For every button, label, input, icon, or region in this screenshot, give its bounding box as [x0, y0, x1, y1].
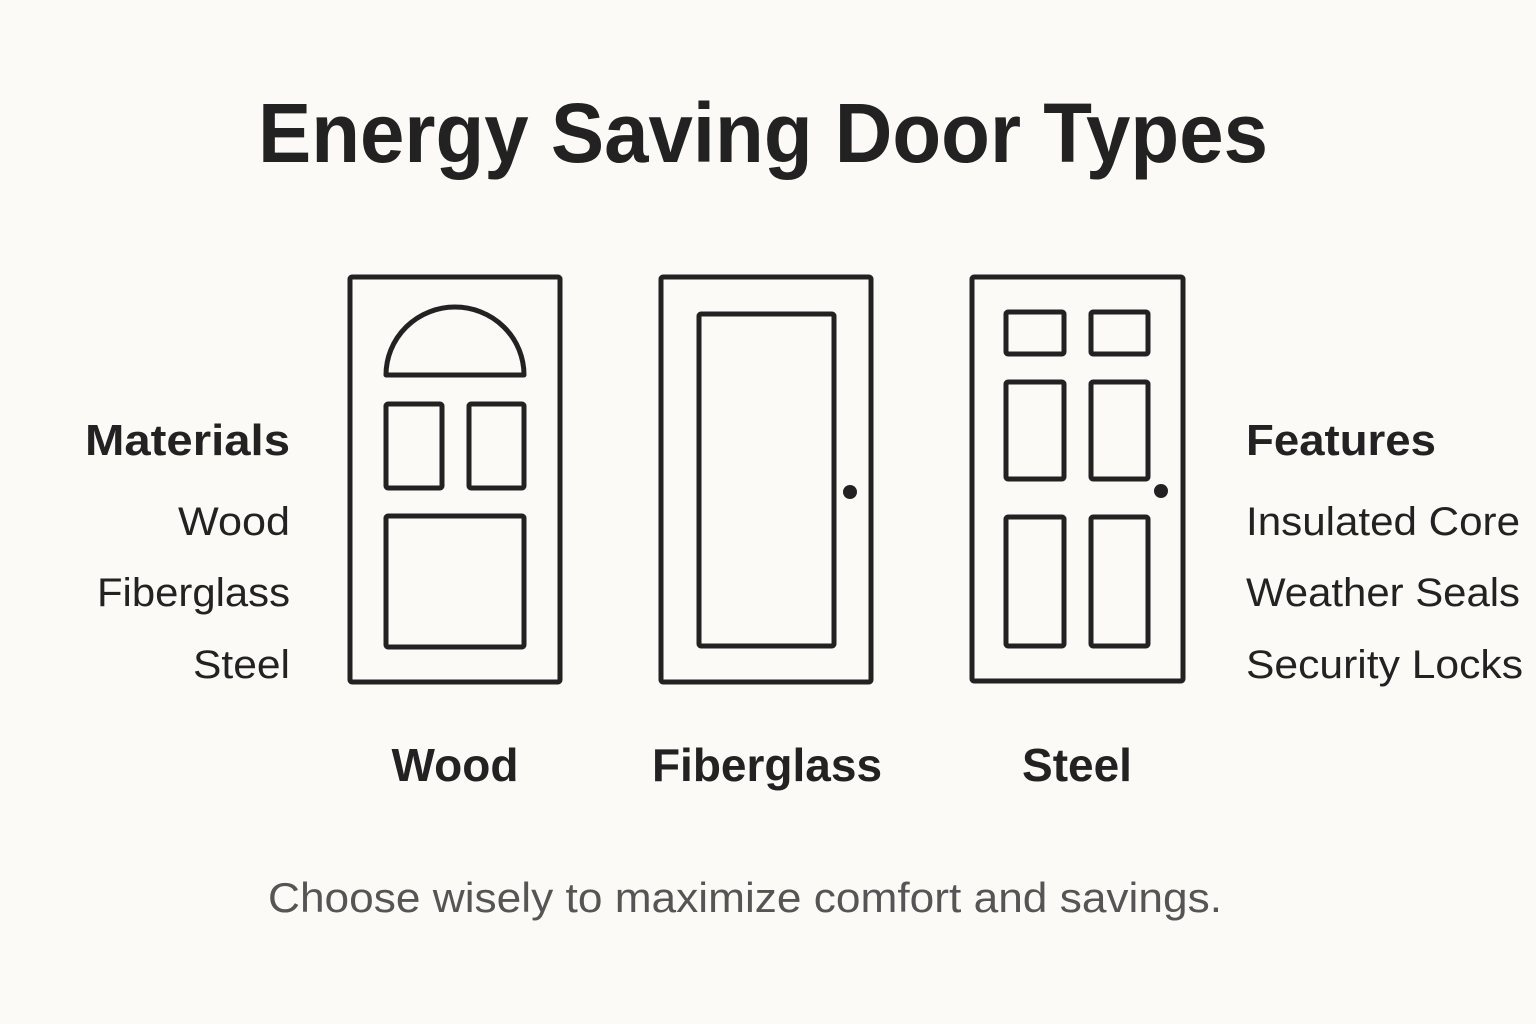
icon: fiberglass door: [661, 277, 871, 682]
text: wood: Wood: [178, 500, 290, 544]
label: wood: Wood: [392, 739, 518, 791]
text: insulated core: Insulated Core: [1246, 500, 1520, 544]
icon: steel door: [972, 277, 1183, 681]
heading: materials: Materials: [85, 416, 290, 465]
heading: features: Features: [1246, 416, 1436, 465]
footer tagline: Choose wisely to maximize comfort and savings.: [268, 874, 1222, 921]
text: fiberglass: Fiberglass: [97, 571, 290, 615]
label: steel: Steel: [1022, 739, 1132, 791]
text: security locks: Security Locks: [1246, 643, 1523, 687]
title: Energy Saving Door Types: [258, 86, 1268, 180]
icon: wood door: [350, 277, 560, 682]
panel: features list: [1246, 416, 1523, 687]
label: fiberglass: Fiberglass: [652, 739, 882, 791]
text: weather seals: Weather Seals: [1246, 571, 1520, 615]
text: steel: Steel: [193, 643, 290, 687]
panel: materials list: [85, 416, 290, 687]
